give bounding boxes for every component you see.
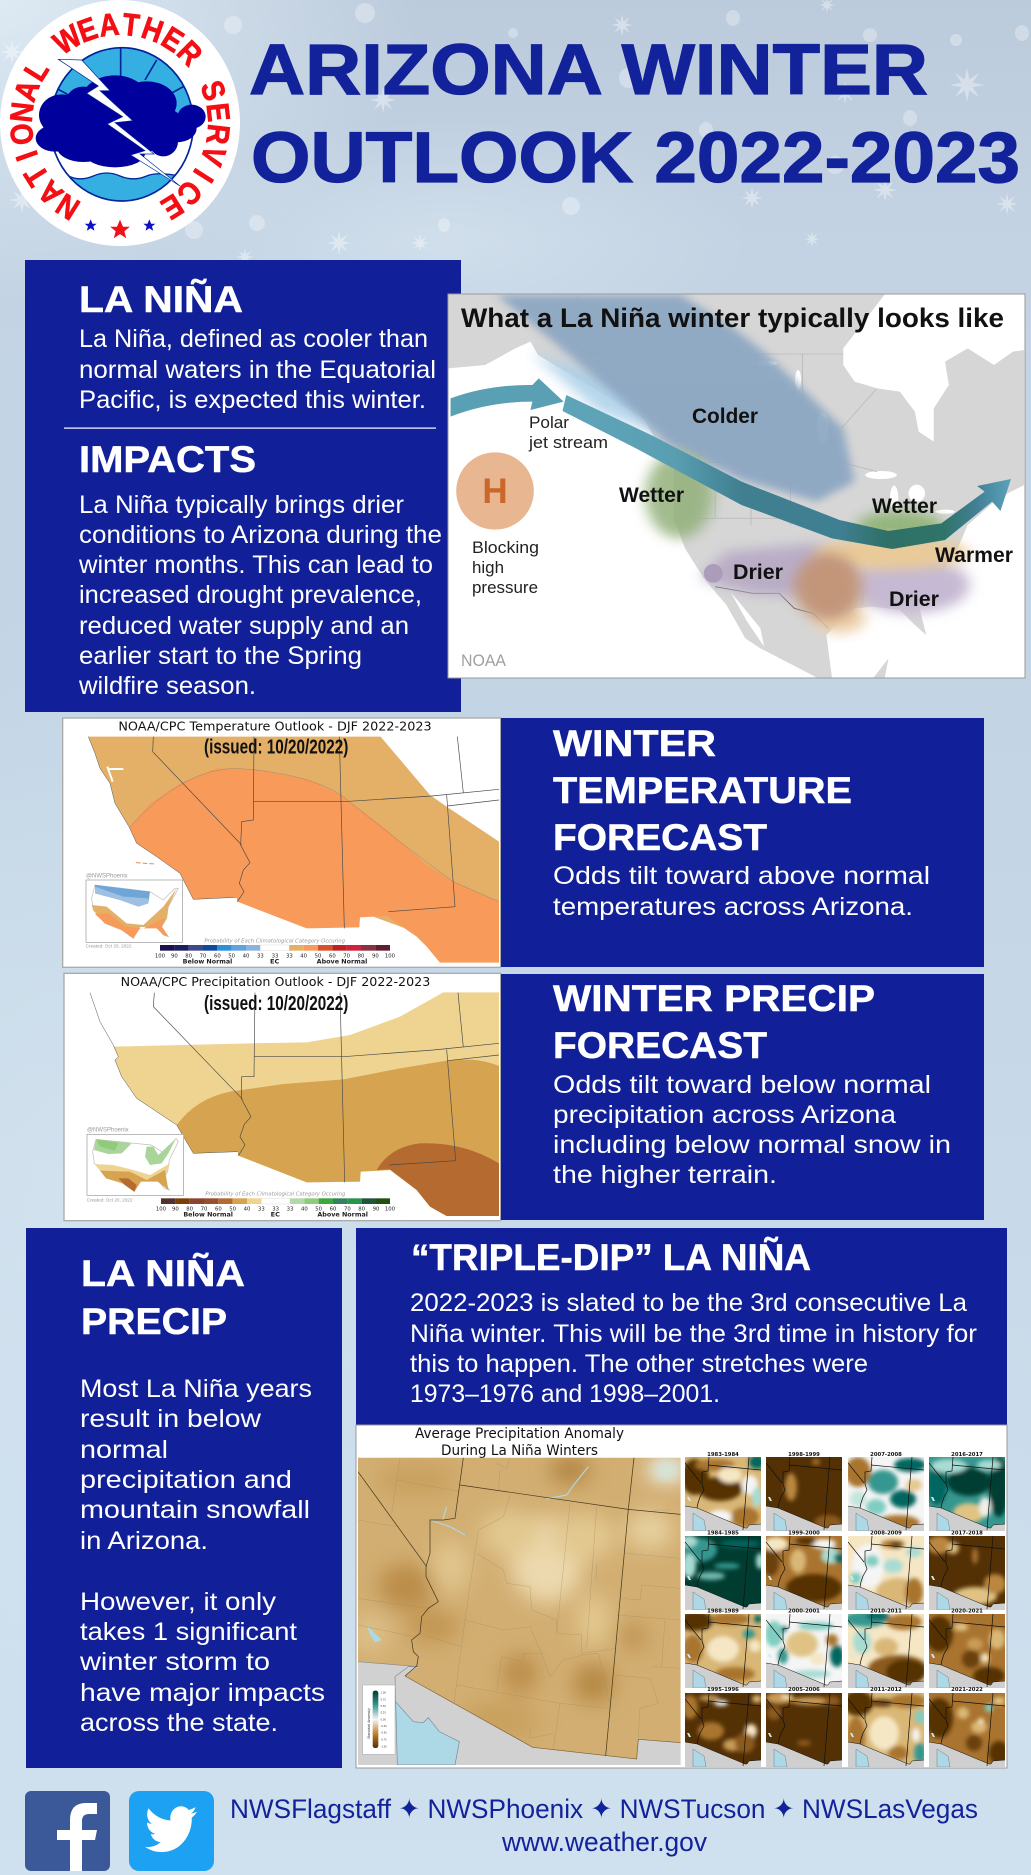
logo: National Weather Service: E: [155, 20, 189, 60]
legend: probability scale: 33: [272, 1207, 279, 1213]
logo: National Weather Service: C: [170, 173, 209, 212]
title: [249, 31, 1020, 198]
map: What a La Niña winter typically looks like: [448, 294, 1025, 678]
heading: PRECIP: [81, 1301, 227, 1342]
text: impacts: [78, 491, 442, 700]
logo: National Weather Service: E: [155, 186, 189, 226]
legend: probability scale: 60: [215, 1207, 222, 1213]
panel: 2011-2012: 2011-2012: [870, 1687, 902, 1693]
legend: probability scale: Below Normal: [183, 1212, 233, 1219]
body text: including below normal snow in: [553, 1131, 951, 1159]
heading: LA NIÑA: [81, 1252, 245, 1294]
legend: standard anomaly colorbar: 0.50: [381, 1705, 386, 1708]
panel: 2016-2017: 2016-2017: [951, 1452, 983, 1458]
logo: National Weather Service: A: [31, 173, 70, 212]
chart: precipitation outlook map: [64, 973, 501, 1221]
logo: National Weather Service: L: [18, 54, 56, 87]
panel: 1999-2000: 1999-2000: [788, 1530, 820, 1536]
panel: 2000-2001: 2000-2001: [788, 1609, 820, 1615]
legend: probability scale: 80: [358, 1207, 366, 1213]
body text: the higher terrain.: [553, 1161, 777, 1189]
logo: National Weather Service: S: [193, 76, 232, 105]
title: OUTLOOK 2022-2023: [251, 119, 1020, 198]
panel: 2011-2012: [843, 1687, 926, 1767]
body text: 2022-2023 is slated to be the 3rd consecutive La: [410, 1289, 967, 1317]
legend: probability scale: 70: [343, 953, 351, 959]
legend: probability scale: 90: [373, 1207, 380, 1213]
logo: National Weather Service: N: [50, 186, 86, 226]
footer: social handles and website: [230, 1794, 978, 1857]
panel: 2020-2021: 2020-2021: [951, 1609, 983, 1615]
heading: La Niña: LA NIÑA: [79, 278, 243, 320]
map labels: Wetter: [619, 484, 684, 507]
body text: across the state.: [80, 1709, 278, 1737]
body text: [553, 1071, 951, 1189]
panel: 2005-2006: [766, 1687, 842, 1767]
body text: result in below: [80, 1405, 262, 1433]
body text: in Arizona.: [80, 1527, 208, 1555]
legend: probability scale: 80: [186, 1207, 194, 1213]
heading: “TRIPLE-DIP” LA NIÑA: [411, 1236, 811, 1278]
heading: FORECAST: [553, 1025, 767, 1066]
legend: probability scale: Probability of Each Climatological Category Occuring: [204, 938, 346, 944]
legend: probability scale: 90: [372, 953, 379, 959]
body text: precipitation and: [80, 1466, 292, 1494]
logo: National Weather Service: I: [186, 163, 220, 188]
legend: standard anomaly colorbar: -0.50: [381, 1732, 387, 1735]
panel: winter precip forecast: [501, 974, 984, 1220]
panel: 2016-2017: [927, 1452, 1009, 1531]
inset: US temperature map: @NWSPhoenix: [86, 874, 128, 880]
legend: probability scale: 70: [200, 953, 207, 959]
text: impacts: earlier start to the Spring: [79, 642, 362, 670]
legend: probability scale: 33: [287, 1207, 293, 1213]
map labels: [461, 405, 1013, 670]
legend: probability scale: 33: [258, 1207, 265, 1213]
panel: 1995-1996: [682, 1687, 762, 1767]
heading: TEMPERATURE: [553, 770, 852, 811]
legend: probability scale: 60: [214, 953, 221, 959]
body text: takes 1 significant: [80, 1618, 297, 1646]
panel: 1998-1999: 1998-1999: [788, 1452, 820, 1458]
panel: 1999-2000: [763, 1530, 844, 1610]
logo: National Weather Service: R: [199, 122, 236, 146]
logo: National Weather Service: [0, 0, 240, 246]
logo: National Weather Service: T: [121, 7, 141, 44]
map labels: Polar: [529, 413, 569, 432]
panel: winter temperature forecast: [501, 718, 984, 967]
legend: probability scale: 90: [172, 1207, 179, 1213]
chart: temperature outlook map: [63, 718, 501, 967]
legend: probability scale: 50: [315, 953, 322, 959]
panel: 2007-2008: 2007-2008: [870, 1452, 902, 1458]
logo: National Weather Service: O: [4, 121, 41, 147]
panel: 2007-2008: [845, 1452, 926, 1531]
legend: probability scale: [156, 1192, 396, 1219]
legend: probability scale: 40: [300, 953, 308, 959]
panel: 2005-2006: 2005-2006: [788, 1687, 820, 1693]
logo: National Weather Service: V: [193, 141, 232, 170]
legend: probability scale: 100: [156, 1207, 167, 1213]
legend: standard anomaly colorbar: -1.00: [381, 1746, 387, 1749]
logo: National Weather Service: A: [7, 76, 47, 106]
body text: Odds tilt toward below normal: [553, 1071, 931, 1099]
legend: probability scale: 100: [155, 953, 166, 959]
heading: WINTER: [553, 723, 716, 764]
panel: 2017-2018: 2017-2018: [951, 1530, 983, 1536]
panel: 1988-1989: [685, 1608, 761, 1688]
legend: probability scale: 70: [344, 1207, 351, 1213]
panel: 1984-1985: [681, 1530, 764, 1610]
footer: social handles and website: NWSFlagstaff ✦ NWSPhoenix ✦ NWSTucson ✦ NWSLasVegas: [230, 1794, 978, 1824]
body text: Most La Niña years: [80, 1375, 312, 1403]
map labels: high: [472, 558, 504, 577]
panel: 2017-2018: [927, 1530, 1006, 1610]
panel: 1984-1985: 1984-1985: [707, 1530, 739, 1536]
panel: 1983-1984: [681, 1452, 765, 1531]
map labels: Colder: [692, 405, 758, 428]
arrow: polar jet stream: [562, 395, 1011, 549]
heading: FORECAST: [553, 817, 767, 858]
legend: probability scale: 50: [229, 1207, 237, 1213]
heading: WINTER PRECIP: [553, 978, 875, 1019]
heading: impacts: IMPACTS: [79, 439, 256, 480]
legend: probability scale: Above Normal: [317, 958, 367, 965]
legend: probability scale: 40: [301, 1207, 308, 1213]
map labels: Blocking: [472, 538, 539, 557]
panel: 1998-1999: [766, 1452, 842, 1531]
legend: probability scale: EC: [270, 958, 280, 965]
legend: probability scale: 80: [185, 953, 193, 959]
text: La Niña definition: Pacific, is expected this winter.: [79, 386, 426, 414]
logo: National Weather Service: A: [97, 7, 121, 44]
heading: [81, 1252, 245, 1342]
icon: blocking high pressure: [456, 452, 534, 530]
chart title: NOAA/CPC Temperature Outlook - DJF 2022-2023: [118, 719, 432, 734]
chart: average precipitation anomaly composite: [350, 1425, 1009, 1768]
panel: 2020-2021: [925, 1609, 1005, 1688]
text: impacts: increased drought prevalence,: [79, 581, 422, 609]
footer: social handles and website: www.weather.gov: [501, 1827, 707, 1857]
legend: standard anomaly colorbar: 0.75: [381, 1698, 386, 1701]
logo: National Weather Service: N: [4, 100, 41, 124]
legend: standard anomaly colorbar: 0.00: [381, 1718, 386, 1721]
legend: probability scale: 40: [244, 1207, 251, 1213]
panel: 2010-2011: [844, 1609, 928, 1688]
legend: probability scale: 60: [330, 1207, 337, 1213]
body text: [79, 1375, 325, 1737]
text: impacts: La Niña typically brings drier: [79, 491, 404, 519]
body text: winter storm to: [79, 1648, 270, 1676]
panel: La Niña precip: [26, 1228, 342, 1768]
chart title: NOAA/CPC Precipitation Outlook - DJF 2022-2023: [121, 974, 430, 989]
body text: Niña winter. This will be the 3rd time in history for: [410, 1320, 977, 1348]
arrow: Pacific jet: [451, 378, 564, 417]
legend: probability scale: 50: [315, 1207, 323, 1213]
logo: National Weather Service: E: [73, 11, 102, 50]
legend: probability scale: 100: [385, 953, 396, 959]
panel: 2010-2011: 2010-2011: [870, 1609, 902, 1615]
legend: probability scale: 80: [358, 953, 365, 959]
chart title: Average Precipitation Anomaly: [415, 1426, 624, 1442]
icon: Facebook: [25, 1791, 110, 1871]
legend: probability scale: 100: [385, 1207, 396, 1213]
map labels: Wetter: [872, 495, 937, 518]
legend: probability scale: 40: [243, 953, 250, 959]
inset: US precipitation map: @NWSPhoenix: [87, 1128, 129, 1134]
body text: normal: [80, 1436, 168, 1464]
map heading: What a La Niña winter typically looks like: [461, 303, 1004, 333]
map labels: pressure: [472, 578, 538, 597]
panel: 1983-1984: 1983-1984: [707, 1452, 739, 1458]
map labels: Drier: [733, 561, 783, 584]
logo: National Weather Service: R: [170, 34, 209, 73]
map labels: Warmer: [935, 544, 1013, 567]
legend: probability scale: 33: [286, 953, 293, 959]
body text: [410, 1289, 977, 1408]
text: La Niña definition: La Niña, defined as cooler than: [79, 325, 428, 353]
legend: probability scale: Below Normal: [183, 958, 232, 965]
issued date: (issued: 10/20/2022): [204, 993, 348, 1015]
icon: Twitter: [129, 1791, 214, 1871]
chart title: During La Niña Winters: [441, 1443, 598, 1459]
issued date: (issued: 10/20/2022): [204, 736, 348, 758]
legend: probability scale: [155, 938, 396, 965]
panel: La Niña and impacts: [25, 260, 461, 712]
legend: probability scale: 50: [228, 953, 236, 959]
inset: US temperature map: [86, 874, 183, 949]
legend: probability scale: Probability of Each Climatological Category Occuring: [205, 1192, 346, 1198]
text: impacts: winter months. This can lead to: [78, 551, 433, 579]
logo: National Weather Service: E: [199, 101, 236, 123]
legend: probability scale: 33: [272, 953, 278, 959]
body text: precipitation across Arizona: [553, 1101, 896, 1129]
logo: National Weather Service: H: [137, 11, 168, 50]
panel: 2008-2009: [848, 1530, 924, 1610]
legend: standard anomaly colorbar: -0.75: [381, 1738, 387, 1741]
map labels: Drier: [889, 588, 939, 611]
inset: US precipitation map: [87, 1128, 184, 1202]
panel: 1995-1996: 1995-1996: [707, 1687, 739, 1693]
body text: mountain snowfall: [80, 1496, 310, 1524]
panel: triple-dip La Niña: [356, 1228, 1007, 1426]
text: La Niña definition: normal waters in the Equatorial: [79, 356, 436, 384]
small multiples: La Niña winters by year: [677, 1452, 1009, 1767]
panel: 2021-2022: [925, 1687, 1009, 1767]
body text: 1973–1976 and 1998–2001.: [410, 1380, 720, 1408]
logo: National Weather Service: T: [18, 159, 56, 192]
text: impacts: reduced water supply and an: [79, 612, 409, 640]
panel: 1988-1989: 1988-1989: [707, 1609, 739, 1615]
heading: [553, 723, 852, 858]
map: average anomaly: [350, 1457, 687, 1765]
legend: probability scale: EC: [271, 1212, 281, 1219]
body text: However, it only: [80, 1588, 277, 1616]
inset: US temperature map: Created: Oct 20, 2022: [86, 944, 132, 949]
legend: probability scale: 33: [257, 953, 264, 959]
chart title: [415, 1426, 624, 1459]
legend: standard anomaly colorbar: [363, 1685, 395, 1754]
legend: standard anomaly colorbar: 0.25: [381, 1712, 386, 1715]
body text: temperatures across Arizona.: [553, 893, 913, 921]
panel: 2021-2022: 2021-2022: [951, 1687, 983, 1693]
map labels: NOAA: [461, 651, 507, 670]
body text: have major impacts: [80, 1679, 325, 1707]
legend: standard anomaly colorbar: Standard Anomaly: [367, 1708, 371, 1739]
legend: standard anomaly colorbar: 1.00: [381, 1692, 386, 1695]
heading: [553, 978, 875, 1066]
map: What a La Niña winter typically looks like: H: [482, 472, 508, 511]
legend: probability scale: Above Normal: [317, 1212, 368, 1219]
panel: 2008-2009: 2008-2009: [870, 1530, 902, 1536]
body text: [553, 862, 930, 921]
logo: National Weather Service: I: [10, 146, 45, 165]
body text: this to happen. The other stretches were: [410, 1350, 868, 1378]
legend: probability scale: 70: [201, 1207, 208, 1213]
legend: probability scale: 60: [329, 953, 336, 959]
title: ARIZONA WINTER: [249, 31, 928, 110]
legend: probability scale: 90: [171, 953, 178, 959]
map labels: jet stream: [528, 433, 608, 452]
body text: Odds tilt toward above normal: [553, 862, 930, 890]
text: La Niña definition: [79, 325, 436, 414]
legend: standard anomaly colorbar: -0.25: [381, 1725, 387, 1728]
text: impacts: wildfire season.: [78, 672, 256, 700]
logo: National Weather Service: W: [47, 18, 88, 62]
panel: 2000-2001: [765, 1609, 844, 1688]
text: impacts: conditions to Arizona during the: [79, 521, 442, 549]
inset: US precipitation map: Created: Oct 20, 2022: [87, 1197, 133, 1202]
